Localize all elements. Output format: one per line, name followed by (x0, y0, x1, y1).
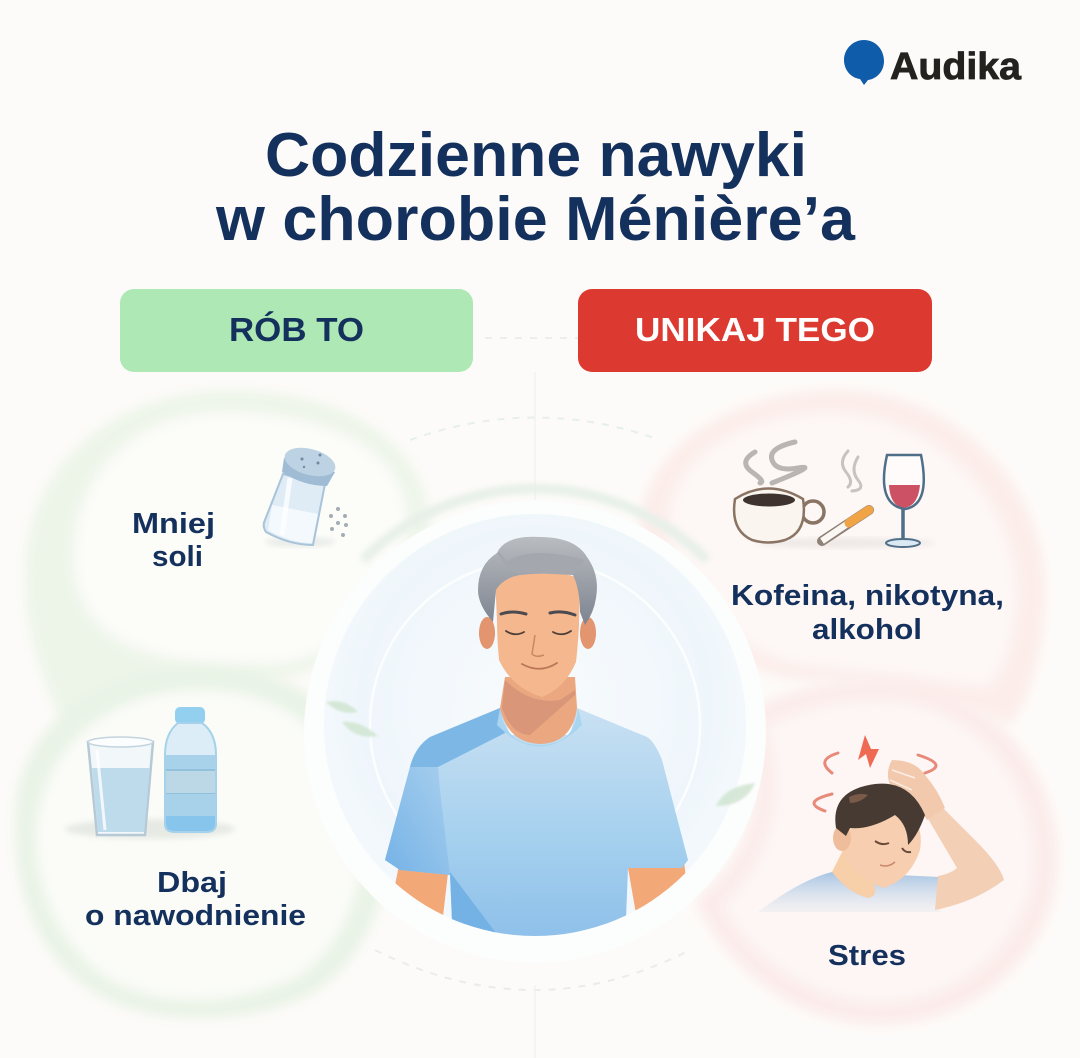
button: rób to: RÓB TO (229, 311, 364, 348)
icon: salt shaker (264, 443, 348, 547)
panel: dbaj o nawodnienie (15, 668, 389, 1019)
label: dbaj o nawodnienie: o nawodnienie (85, 900, 306, 932)
panel: central circle with person (304, 489, 766, 963)
person illustration (385, 537, 688, 945)
label: stres: Stres (828, 940, 906, 972)
icon: leaves (326, 701, 755, 806)
label: kofeina nikotyna alkohol (731, 580, 1004, 646)
title: Codzienne nawyki (265, 121, 807, 190)
title: w chorobie Ménière’a (215, 185, 856, 254)
label: mniej soli: Mniej (132, 508, 215, 540)
label: kofeina nikotyna alkohol: Kofeina, nikotyna, (731, 580, 1004, 612)
icon: coffee cigarette wine (734, 442, 935, 548)
label: dbaj o nawodnienie: Dbaj (157, 867, 227, 899)
icon: speech bubble (844, 40, 884, 85)
title (215, 121, 856, 254)
label: mniej soli: soli (152, 541, 203, 573)
button: unikaj tego (578, 289, 932, 372)
label: dbaj o nawodnienie (85, 867, 306, 932)
icon: stressed person (758, 735, 1004, 912)
logo: Audika (890, 46, 1022, 88)
label: kofeina nikotyna alkohol: alkohol (812, 614, 922, 646)
logo (844, 40, 1022, 88)
panel: kofeina nikotyna alkohol (640, 390, 1045, 725)
button: rób to (120, 289, 473, 372)
label: mniej soli (132, 508, 215, 573)
panel: mniej soli (25, 390, 430, 722)
button: unikaj tego: UNIKAJ TEGO (635, 311, 875, 348)
dashed connector lines (375, 338, 690, 1058)
panel: stres (695, 680, 1058, 1025)
icon: glass and bottle (65, 707, 235, 839)
icon: pain bolt and arcs (814, 735, 936, 811)
